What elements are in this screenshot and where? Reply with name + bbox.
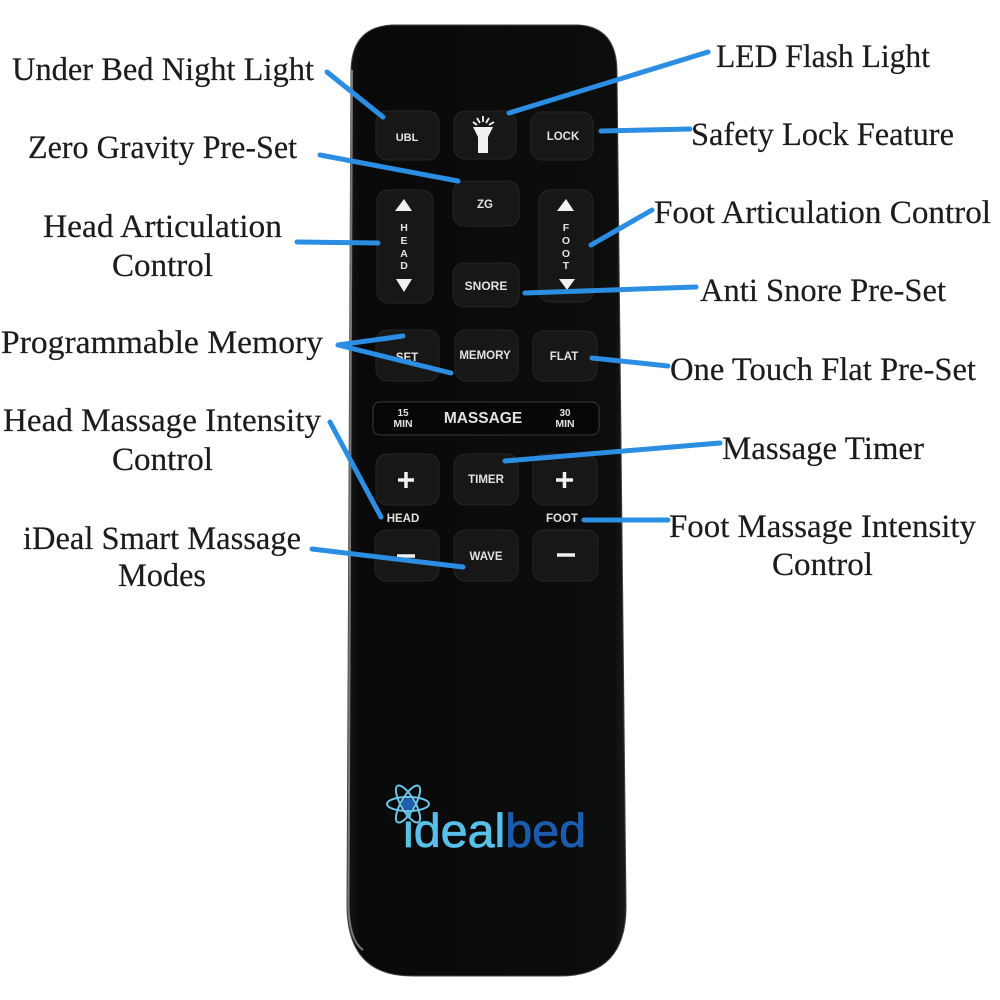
button: LOCK <box>531 112 593 160</box>
label: Programmable Memory: Programmable Memory <box>1 325 323 361</box>
label: iDeal Smart Massage Modes <box>23 521 301 594</box>
button: LOCK: LOCK <box>547 131 580 143</box>
button: foot massage minus <box>533 530 598 581</box>
button: MEMORY <box>455 330 518 381</box>
button: UBL <box>376 111 439 160</box>
label: iDeal Smart Massage Modes: Modes <box>118 558 206 594</box>
massage timer strip: MIN <box>555 418 575 430</box>
massage timer strip: MIN <box>393 418 413 430</box>
leader line: flat <box>592 358 668 366</box>
button: WAVE <box>454 530 518 581</box>
button: MEMORY: MEMORY <box>459 350 511 362</box>
button: ZG: ZG <box>477 199 493 211</box>
label: iDeal Smart Massage Modes: iDeal Smart Massage <box>23 521 301 557</box>
massage timer strip: MASSAGE <box>444 410 522 427</box>
button: SNORE <box>453 263 519 307</box>
leader line: snore <box>525 287 696 293</box>
button: SET: SET <box>396 352 418 364</box>
button: SET <box>376 330 439 381</box>
button: TIMER <box>454 454 518 505</box>
leader line: foot massage <box>584 518 668 522</box>
label: Head Massage Intensity Control: Head Massage Intensity <box>3 403 322 439</box>
label: One Touch Flat Pre-Set: One Touch Flat Pre-Set <box>670 352 976 388</box>
label: Head Massage Intensity Control: Control <box>112 442 213 478</box>
leader line: wave <box>312 549 463 567</box>
button: FOOT rocker: F <box>563 222 570 234</box>
label: Massage Timer: Massage Timer <box>722 431 924 467</box>
leader line: zero gravity <box>320 155 458 181</box>
button: FOOT rocker <box>539 190 593 302</box>
button: foot massage plus <box>533 454 597 505</box>
label: Anti Snore Pre-Set: Anti Snore Pre-Set <box>700 273 946 309</box>
label: Zero Gravity Pre-Set: Zero Gravity Pre-Set <box>28 130 297 166</box>
button: HEAD rocker <box>377 190 433 303</box>
button: head massage minus <box>375 530 439 581</box>
button: LED flash light <box>454 111 516 159</box>
leader line: memory <box>338 336 451 373</box>
leader line: UBL <box>327 72 383 117</box>
label: Foot Massage Intensity Control: Control <box>772 547 873 583</box>
leader line: lock <box>601 129 690 131</box>
button: FOOT rocker: O <box>562 235 570 247</box>
text: HEAD label: HEAD <box>387 513 419 525</box>
leader line: timer <box>505 443 720 461</box>
button: SNORE: SNORE <box>465 279 507 293</box>
button: HEAD rocker: A <box>400 248 408 260</box>
label: Foot Massage Intensity Control <box>669 509 976 583</box>
remote control body <box>347 25 626 976</box>
label: Head Articulation Control <box>43 209 282 284</box>
button: TIMER: TIMER <box>468 474 505 486</box>
massage timer strip <box>373 402 599 435</box>
label: Under Bed Night Light: Under Bed Night Light <box>12 52 314 88</box>
label: Head Articulation Control: Head Articulation <box>43 209 282 245</box>
massage timer strip: 30 <box>559 408 571 419</box>
button: ZG <box>453 181 519 226</box>
button: FLAT <box>533 331 597 381</box>
wordmark: idealbed <box>403 804 586 857</box>
button: HEAD rocker: E <box>400 235 408 247</box>
logo: idealbed <box>387 782 586 857</box>
icon: atom <box>387 782 429 826</box>
leader line: head massage <box>330 422 381 517</box>
label: Head Articulation Control: Control <box>112 248 213 284</box>
button: FOOT rocker: T <box>563 260 570 272</box>
button: FLAT: FLAT <box>550 351 578 363</box>
button: UBL: UBL <box>396 132 419 144</box>
label: Foot Massage Intensity Control: Foot Massage Intensity <box>669 509 976 545</box>
label: Foot Articulation Control: Foot Articulation Control <box>654 195 991 231</box>
label: Safety Lock Feature: Safety Lock Feature <box>691 117 954 153</box>
text: FOOT label: FOOT <box>546 513 578 525</box>
massage timer strip: 15 <box>397 408 409 419</box>
button: HEAD rocker: H <box>400 222 408 234</box>
button: head massage plus <box>376 454 439 505</box>
label: Head Massage Intensity Control <box>3 403 322 478</box>
leader line: LED <box>509 52 708 113</box>
button: HEAD rocker: D <box>400 260 408 272</box>
leader line: foot articulation <box>591 210 652 245</box>
leader line: head articulation <box>297 242 378 243</box>
button: WAVE: WAVE <box>469 551 503 563</box>
label: LED Flash Light: LED Flash Light <box>716 39 930 75</box>
button: FOOT rocker: O <box>562 248 570 260</box>
